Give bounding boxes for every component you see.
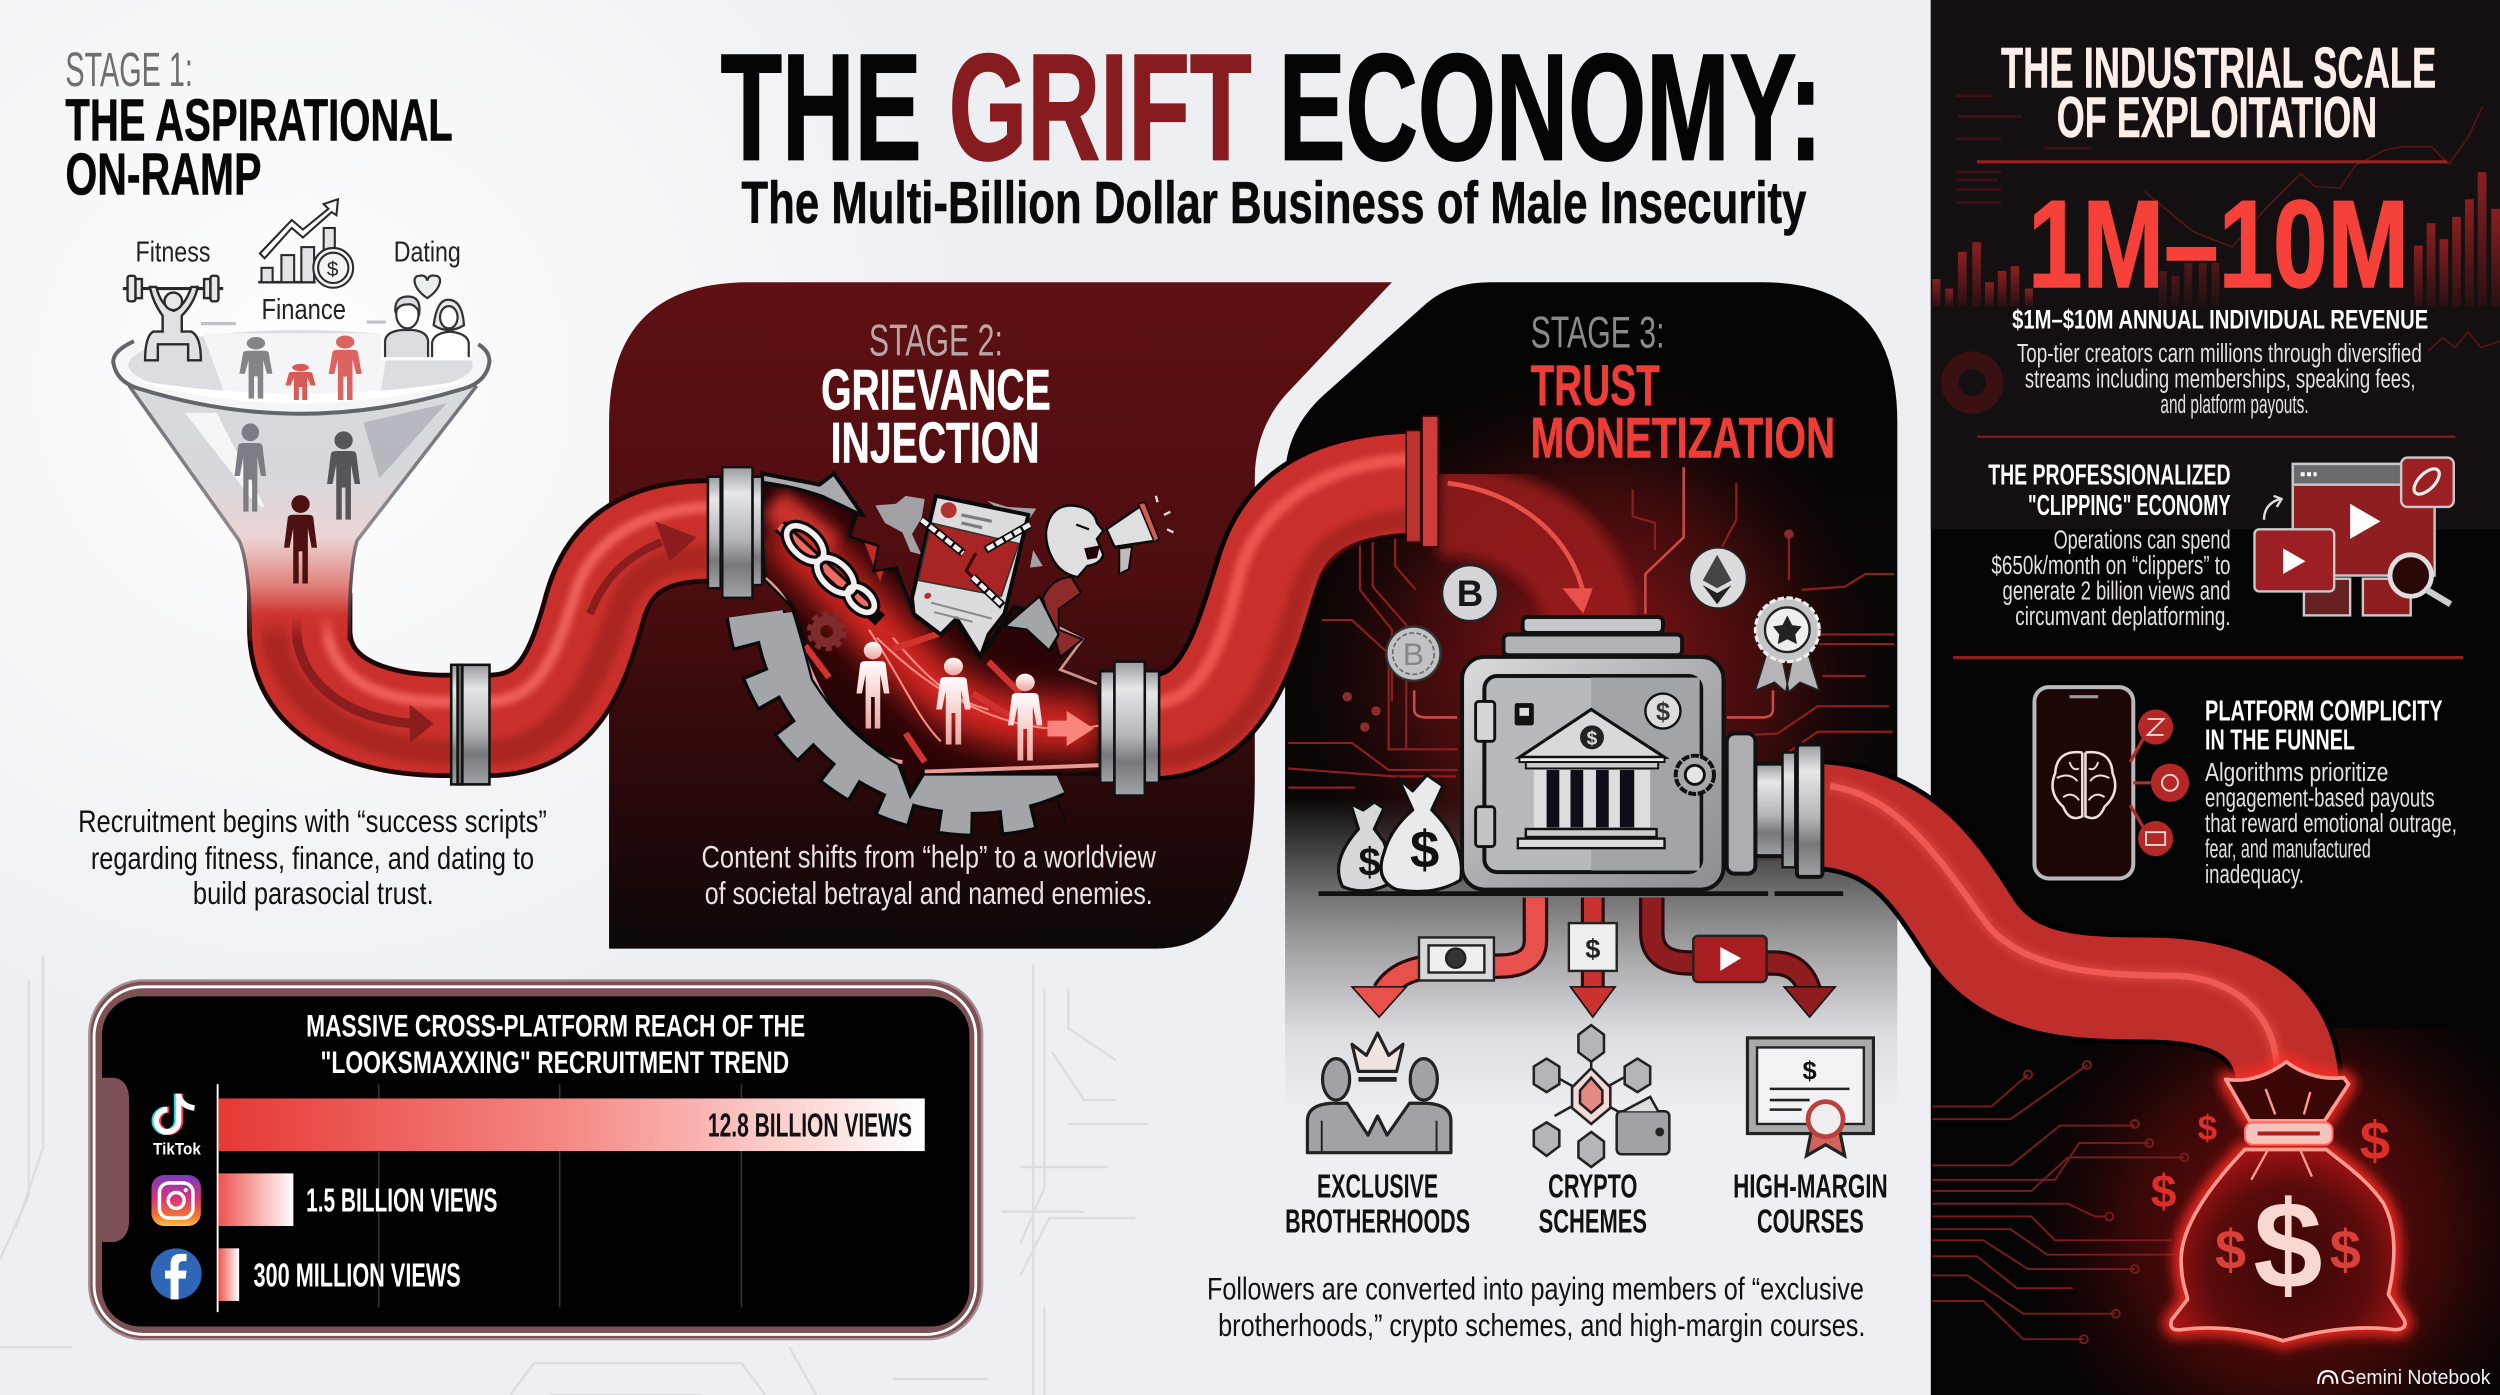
heading: stage 2: STAGE 2: (869, 317, 1003, 366)
injected people (856, 642, 1042, 760)
icon: world map (875, 496, 1043, 568)
icon: gear (756, 614, 1055, 807)
label: finance: Finance (261, 294, 346, 326)
icon: fitness (123, 276, 223, 360)
divider glow 1 (1977, 161, 2447, 163)
panel: right dark column (1931, 0, 2500, 1395)
icon: instagram (151, 1175, 201, 1226)
text: platform complicity (2205, 696, 2457, 889)
panel: phone bar chart (89, 980, 982, 1339)
labels: monetization channels (1285, 1168, 1888, 1240)
icon: money bags: $ (1410, 820, 1439, 879)
text: platform complicity: Algorithms prioritize (2205, 759, 2388, 787)
icon: certificate: $ (1803, 1057, 1817, 1085)
text: stage 1 body: regarding fitness, finance, and dating to (91, 840, 534, 876)
text: stage 1 body: build parasocial trust. (193, 875, 434, 911)
icon: gear top rim (762, 474, 863, 515)
text: stage 1 body (78, 803, 547, 911)
vault glyphs: $ (1656, 699, 1670, 727)
panel: stage 3 background (1285, 282, 1897, 1116)
icon: chained phone (912, 496, 1030, 657)
vault shelf (1319, 892, 1843, 895)
flange: stage 3 entry (1406, 416, 1438, 547)
icon: money bags: $ (1358, 840, 1381, 884)
bar: facebook: 300 MILLION VIEWS (254, 1258, 461, 1295)
background bar chart (1932, 172, 2500, 306)
heading: stage 3: STAGE 3: (1531, 309, 1665, 358)
text: stage 3 body: Followers are converted into paying members of “exclusive (1207, 1270, 1864, 1306)
icon: clipping windows (2254, 458, 2454, 615)
text: annual revenue: and platform payouts. (2160, 391, 2309, 419)
bar: tiktok: 12.8 BILLION VIEWS (708, 1108, 912, 1145)
icon: money bag (2151, 1062, 2405, 1341)
vault glyphs: $ (1587, 729, 1598, 750)
label: fitness: Fitness (136, 236, 210, 268)
heading: stage 2: GRIEVANCE (821, 359, 1051, 423)
text: stage 3 body: brotherhoods,” crypto schemes, and high-margin courses. (1218, 1307, 1865, 1343)
heading: stage 3 (1531, 309, 1835, 471)
bar: instagram (218, 1173, 497, 1226)
chart gridlines (379, 1084, 741, 1307)
text: clipping economy: $650k/month on “clippers” to (1991, 552, 2231, 580)
title: ECONOMY: (1279, 23, 1822, 192)
icon: certificate (1747, 1038, 1873, 1156)
title: GRIFT (949, 23, 1252, 192)
vault glyphs (1587, 699, 1670, 750)
funnel people (235, 335, 362, 584)
pipe: stage 2 to stage 3 (1151, 459, 1411, 759)
icon: crypto network (1534, 1025, 1669, 1167)
heading: industrial scale (2001, 37, 2436, 150)
icon: ethereum coin (1689, 548, 1747, 608)
text: platform complicity: fear, and manufactured (2205, 836, 2371, 864)
text: clipping economy: generate 2 billion views and (2003, 577, 2231, 605)
heading: stage 2 (821, 317, 1051, 475)
flange: pipe 2 (708, 467, 762, 598)
pipe: funnel to stage 2 (274, 507, 710, 753)
labels: monetization channels: COURSES (1757, 1203, 1864, 1240)
text: platform complicity: IN THE FUNNEL (2205, 724, 2355, 756)
text: stage 3 body (1207, 1270, 1865, 1343)
text: annual revenue (2012, 303, 2428, 419)
heading: stage 3: MONETIZATION (1531, 407, 1835, 471)
chart title (306, 1007, 805, 1080)
heading: stage 1: THE ASPIRATIONAL (65, 87, 453, 153)
labels: monetization channels: BROTHERHOODS (1285, 1203, 1470, 1240)
flange: stage 2 exit (1100, 662, 1159, 796)
labels: monetization channels: EXCLUSIVE (1317, 1168, 1438, 1205)
icon: exclusive brotherhood (1307, 1033, 1451, 1153)
icon: bitcoin coins: B (1403, 636, 1424, 672)
icon: dating couple (381, 275, 472, 360)
heading: stage 3: TRUST (1531, 354, 1660, 418)
circuit lines left of bag (1932, 1061, 2188, 1343)
text: platform complicity: inadequacy. (2205, 861, 2304, 889)
text: stage 2 body: Content shifts from “help” to a worldview (702, 838, 1157, 874)
pipe: broken grievance section (762, 483, 1100, 794)
glow behind bag (2011, 1028, 2500, 1395)
chain (780, 519, 880, 620)
icon: money bag: $ (2360, 1111, 2390, 1171)
bar: facebook (218, 1248, 461, 1301)
icon: bitcoin coins: B (1457, 573, 1483, 614)
icon: money bag: $ (2253, 1176, 2323, 1315)
heading: stage 1: ON-RAMP (65, 142, 261, 208)
text: stage 2 body: of societal betrayal and named enemies. (705, 875, 1153, 911)
chart title: "LOOKSMAXXING" RECRUITMENT TREND (320, 1044, 789, 1080)
icon: dollar bills and play box (1419, 923, 1767, 982)
text: clipping economy (1988, 460, 2231, 631)
panel: stage 2 background (609, 282, 1392, 949)
text: clipping economy: "CLIPPING" ECONOMY (2028, 490, 2231, 522)
pipe: feed into vault (1438, 483, 1593, 630)
labels: monetization channels: SCHEMES (1539, 1203, 1647, 1240)
icon: bitcoin coins (1386, 565, 1498, 681)
flange: pipe 1 (451, 665, 489, 784)
big number: 1M–10M (2028, 175, 2409, 314)
icon: finance chart (258, 199, 353, 288)
chart title: MASSIVE CROSS-PLATFORM REACH OF THE (306, 1007, 805, 1043)
icon: money bag: $ (2330, 1218, 2361, 1281)
subtitle: The Multi-Billion Dollar Business of Male Insecurity (741, 170, 1807, 236)
icon: facebook (151, 1248, 202, 1299)
divider glow 3 (1953, 657, 2463, 659)
distribution: three branching pipes (1352, 898, 1835, 1017)
text: clipping economy: circumvant deplatforming. (2015, 603, 2231, 631)
circuit glow behind vault (1288, 383, 1896, 861)
pipe: vault to money bag (1810, 786, 2288, 1092)
icon: tiktok: TikTok (153, 1139, 202, 1158)
labels: monetization channels: CRYPTO (1548, 1168, 1637, 1205)
icon: badge (1755, 598, 1819, 692)
credit: gemini notebook: Gemini Notebook (2341, 1367, 2490, 1389)
icon: money bag: $ (2151, 1165, 2177, 1217)
icon: dollar bills and play box: $ (1585, 933, 1600, 964)
text: stage 1 body: Recruitment begins with “success scripts” (78, 803, 547, 839)
title: THE (721, 23, 922, 192)
icon: megaphone (1107, 496, 1173, 574)
chart axis (217, 1084, 219, 1312)
bar: instagram: 1.5 BILLION VIEWS (306, 1183, 497, 1220)
heading: stage 1: STAGE 1: (65, 44, 193, 97)
text: clipping economy: THE PROFESSIONALIZED (1988, 460, 2231, 492)
icon: funnel (113, 322, 489, 641)
icon: shouting figure (1004, 505, 1103, 657)
text: clipping economy: Operations can spend (2054, 526, 2231, 554)
title (721, 23, 1822, 192)
icon: money bag: $ (2198, 1109, 2217, 1148)
icon: tiktok (153, 1094, 202, 1158)
icon: money bag: $ (2215, 1218, 2246, 1281)
heading: stage 2: INJECTION (831, 411, 1040, 475)
bar: tiktok (218, 1098, 925, 1151)
icon: vault (1462, 617, 1822, 890)
arrows on pipe (410, 521, 697, 743)
heading: stage 1 (65, 44, 453, 208)
background line chart and donut (1950, 96, 2500, 405)
divider glow 2 (1977, 436, 2455, 438)
label: dating: Dating (394, 236, 461, 268)
text: stage 2 body (702, 838, 1157, 911)
icon: phone with brain (2034, 687, 2189, 878)
icon: money bags (1339, 775, 1461, 891)
labels: monetization channels: HIGH-MARGIN (1733, 1168, 1888, 1205)
icon: finance chart: $ (327, 258, 339, 281)
